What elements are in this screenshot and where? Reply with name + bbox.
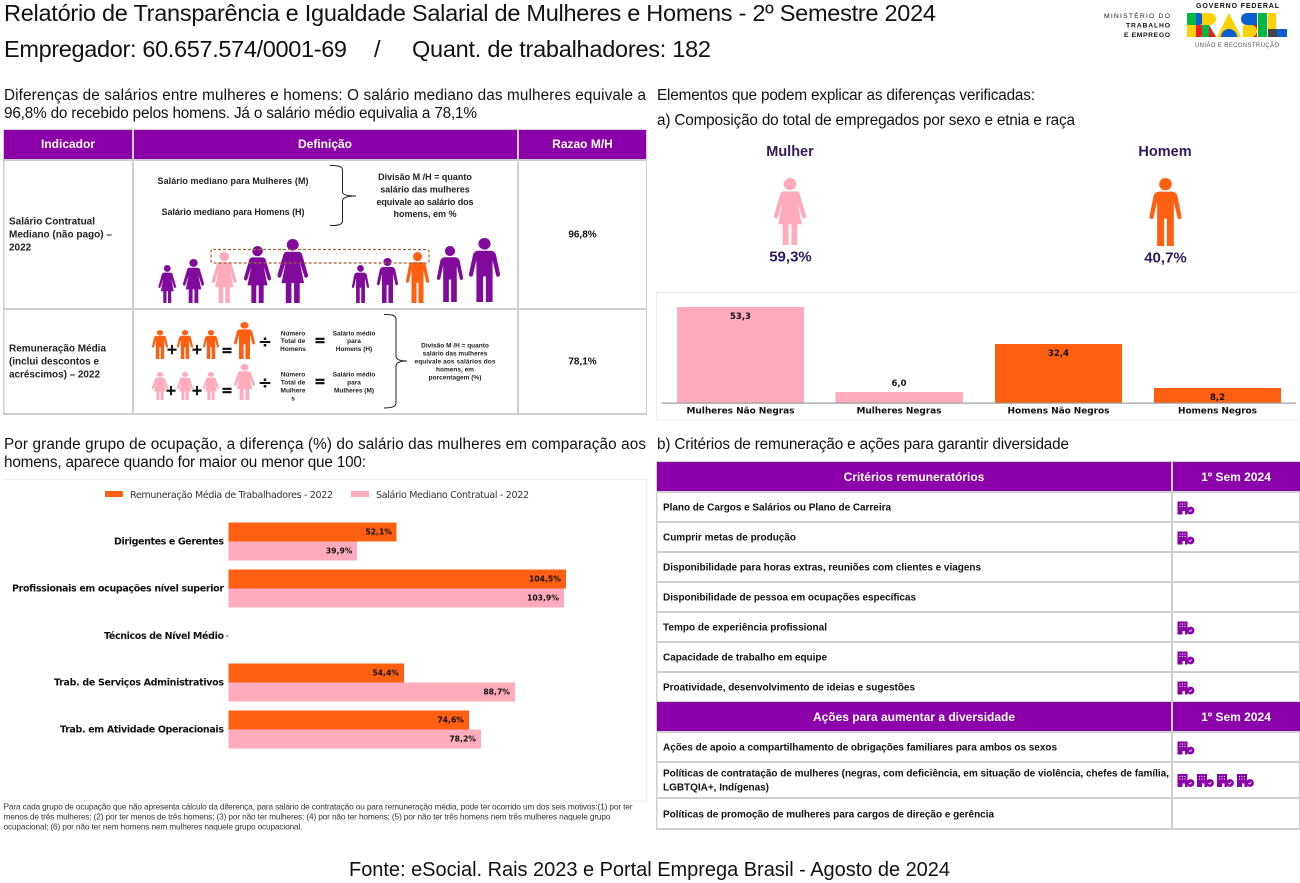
row label: salário contratual: Salário Contratual bbox=[9, 216, 95, 228]
composição: mulher: 59,3% bbox=[769, 248, 812, 266]
title bbox=[4, 0, 936, 62]
logo: ministério: MINISTÉRIO DO bbox=[1104, 11, 1170, 20]
text: elementos explicativos: a) Composição do total de empregados por sexo e etnia e raça bbox=[657, 112, 1075, 129]
definição: remuneração média homens: Total de bbox=[281, 338, 306, 345]
chave e divisão M/H: porcentagem (%) bbox=[429, 374, 481, 382]
header: colunas: Definição bbox=[298, 137, 352, 151]
definição: remuneração média homens: + bbox=[166, 342, 178, 358]
bar chart: sexo e raça: 32,4 bbox=[1048, 349, 1069, 359]
row label: remuneração média: (inclui descontos e bbox=[9, 356, 99, 368]
chave e divisão M/H: salário das mulheres bbox=[423, 350, 488, 358]
ícones: ações bbox=[1178, 742, 1254, 787]
bars: dirigentes e gerentes bbox=[114, 522, 396, 560]
header: ações para diversidade: 1º Sem 2024 bbox=[1201, 710, 1271, 724]
linhas de critérios: Disponibilidade de pessoa em ocupações específicas bbox=[663, 592, 916, 604]
definição: remuneração média mulheres: + bbox=[191, 383, 203, 399]
title: Empregador: 60.657.574/0001-69 bbox=[4, 36, 347, 62]
fonte: Fonte: eSocial. Rais 2023 e Portal Emprega Brasil - Agosto de 2024 bbox=[349, 859, 950, 881]
definição: remuneração média mulheres: = bbox=[221, 383, 233, 399]
bar chart: sexo e raça: 53,3 bbox=[730, 312, 751, 322]
logo: ministério: TRABALHO bbox=[1126, 22, 1170, 30]
linhas de ações: Ações de apoio a compartilhamento de obrigações familiares para ambos os sexos bbox=[663, 742, 1057, 754]
row label: remuneração média bbox=[9, 344, 106, 380]
definição: remuneração média mulheres: Total de bbox=[281, 380, 306, 386]
bars: serviços administrativos bbox=[54, 664, 515, 702]
row label: remuneração média: acréscimos) – 2022 bbox=[9, 370, 100, 380]
bar chart: sexo e raça: Mulheres Negras bbox=[856, 406, 942, 416]
text: diferenças de salários: Diferenças de salários entre mulheres e homens: O salário mediano das mulheres equivale a bbox=[4, 87, 646, 104]
logo: governo federal: UNIÃO E RECONSTRUÇÃO bbox=[1195, 42, 1279, 49]
chave e divisão M/H: homens, em bbox=[436, 366, 474, 374]
definição: remuneração média mulheres: Número bbox=[281, 372, 305, 378]
bar chart: sexo e raça: Homens Negros bbox=[1178, 406, 1257, 416]
bar chart: sexo e raça: Mulheres Não Negras bbox=[686, 406, 794, 416]
composição: homem: Homem bbox=[1138, 144, 1192, 160]
row label: salário contratual bbox=[9, 216, 112, 254]
bars: serviços administrativos: Trab. de Serviços Administrativos bbox=[54, 678, 224, 688]
definição: remuneração média homens: Salário médio bbox=[333, 330, 375, 338]
title: Quant. de trabalhadores: 182 bbox=[412, 36, 711, 62]
linhas de critérios: Tempo de experiência profissional bbox=[663, 622, 827, 634]
chave e divisão M/H: equivale aos salários dos bbox=[414, 358, 496, 366]
definição: remuneração média mulheres: s bbox=[291, 396, 295, 402]
panel: tabela de critérios bbox=[656, 461, 1300, 830]
definição: remuneração média homens: = bbox=[221, 343, 233, 359]
definição: remuneração média homens: para bbox=[347, 338, 361, 345]
header: colunas: Indicador bbox=[41, 137, 95, 151]
bars: serviços administrativos: 54,4% bbox=[372, 668, 399, 678]
bar chart: sexo e raça: 6,0 bbox=[891, 379, 907, 389]
bar chart: sexo e raça: Homens Não Negros bbox=[1008, 406, 1110, 416]
text: diferenças de salários: 96,8% do recebido pelos homens. Já o salário médio equivalia a 78,1% bbox=[4, 105, 477, 122]
composição: homem bbox=[1138, 144, 1192, 266]
composição: mulher: Mulher bbox=[766, 144, 814, 160]
bars: dirigentes e gerentes: Dirigentes e Gerentes bbox=[114, 536, 224, 548]
header: ações para diversidade bbox=[813, 710, 1271, 724]
linhas de ações: Políticas de contratação de mulheres (negras, com deficiência, em situação de violência, chefes de família, bbox=[663, 768, 1169, 780]
header: ações para diversidade: Ações para aumentar a diversidade bbox=[813, 710, 1015, 724]
text: por grande grupo de ocupação: homens, aparece quando for maior ou menor que 100: bbox=[4, 454, 366, 471]
definição: remuneração média mulheres bbox=[152, 364, 375, 402]
definição: salário mediano: Salário mediano para Homens (H) bbox=[162, 207, 304, 217]
valor: 78,1%: 78,1% bbox=[568, 356, 597, 368]
linhas de critérios: Cumprir metas de produção bbox=[663, 532, 796, 544]
bars: profissionais: Profissionais em ocupações nível superior bbox=[12, 584, 224, 594]
header: critérios remuneratórios: Critérios remuneratórios bbox=[844, 470, 985, 484]
definição: remuneração média homens: ÷ bbox=[258, 332, 272, 352]
logo: governo federal bbox=[1187, 3, 1287, 49]
definição: remuneração média mulheres: Mulhere bbox=[281, 388, 306, 394]
header: colunas: Razao M/H bbox=[552, 137, 613, 151]
row label: salário contratual: Mediano (não pago) – bbox=[9, 230, 112, 240]
definição: remuneração média homens: Homens bbox=[280, 346, 306, 353]
bars: atividade operacionais bbox=[60, 710, 481, 748]
text: diferenças de salários bbox=[4, 87, 646, 122]
logo: ministério bbox=[1104, 11, 1170, 39]
linhas de critérios: Capacidade de trabalho em equipe bbox=[663, 652, 827, 664]
header: critérios remuneratórios: 1º Sem 2024 bbox=[1201, 470, 1271, 484]
text: elementos explicativos: Elementos que podem explicar as diferenças verificadas: bbox=[657, 87, 1035, 104]
legend: Remuneração Média de Trabalhadores - 2022 bbox=[130, 490, 333, 501]
definição: remuneração média mulheres: ÷ bbox=[258, 373, 272, 393]
linhas de critérios bbox=[663, 502, 981, 694]
linhas de critérios: Disponibilidade para horas extras, reuniões com clientes e viagens bbox=[663, 562, 981, 574]
definição: remuneração média homens: = bbox=[314, 333, 326, 349]
bar chart: sexo e raça: 8,2 bbox=[1210, 393, 1225, 403]
definição: salário mediano: salário das mulheres bbox=[380, 184, 470, 194]
definição: remuneração média homens bbox=[152, 322, 375, 359]
definição: salário mediano bbox=[158, 165, 474, 226]
footnote: ocupacional; (6) por não ter nem homens nem mulheres naquele grupo ocupacional. bbox=[4, 822, 302, 832]
linhas de ações: Políticas de promoção de mulheres para cargos de direção e gerência bbox=[663, 810, 994, 820]
bars: atividade operacionais: Trab. em Atividade Operacionais bbox=[60, 724, 224, 736]
bars: dirigentes e gerentes: 39,9% bbox=[326, 546, 353, 556]
row label: remuneração média: Remuneração Média bbox=[9, 344, 106, 354]
bars: dirigentes e gerentes: 52,1% bbox=[365, 528, 392, 536]
panel: tabela de indicadores bbox=[3, 129, 647, 415]
bars: profissionais: 103,9% bbox=[527, 594, 559, 602]
linhas de ações bbox=[663, 742, 1169, 820]
text: elementos explicativos bbox=[657, 87, 1075, 129]
heading: critérios de remuneração: b) Critérios de remuneração e ações para garantir diversidade bbox=[657, 436, 1069, 453]
header: critérios remuneratórios bbox=[844, 470, 1271, 484]
bars: profissionais bbox=[12, 570, 566, 608]
linhas de critérios: Plano de Cargos e Salários ou Plano de Carreira bbox=[663, 502, 891, 514]
composição: homem: 40,7% bbox=[1144, 250, 1187, 266]
definição: remuneração média mulheres: + bbox=[165, 383, 177, 399]
definição: salário mediano: Divisão M /H = quanto bbox=[378, 172, 472, 182]
definição: remuneração média mulheres: = bbox=[314, 374, 326, 390]
definição: remuneração média mulheres: Salário médio bbox=[333, 372, 375, 378]
footnote bbox=[4, 802, 633, 832]
ícones: critérios bbox=[1178, 502, 1194, 694]
bars: profissionais: 104,5% bbox=[529, 574, 561, 584]
definição: remuneração média homens: Homens (H) bbox=[336, 346, 372, 353]
legend bbox=[105, 490, 529, 501]
valor: 96,8%: 96,8% bbox=[568, 230, 597, 240]
definição: remuneração média mulheres: Mulheres (M) bbox=[334, 388, 374, 394]
bar chart: sexo e raça bbox=[656, 292, 1300, 420]
definição: remuneração média homens: Número bbox=[281, 330, 305, 338]
header: colunas bbox=[41, 137, 613, 151]
title: / bbox=[374, 36, 381, 62]
text: por grande grupo de ocupação: Por grande grupo de ocupação, a diferença (%) do salário das mulheres em comparação aos bbox=[4, 436, 646, 453]
definição: salário mediano: homens, em % bbox=[393, 209, 457, 219]
footnote: Para cada grupo de ocupação que não apresenta cálculo da diferença, para salário de contratação ou para remuneração média, pode ter ocorrido um dos seis motivos:(1) por ter bbox=[4, 802, 633, 812]
title: Relatório de Transparência e Igualdade Salarial de Mulheres e Homens - 2º Semestre 2024 bbox=[4, 0, 936, 26]
ícones: pessoas ordenadas por salário bbox=[158, 238, 500, 303]
logo: ministério: E EMPREGO bbox=[1124, 32, 1170, 39]
definição: salário mediano: equivale ao salário dos bbox=[376, 197, 474, 207]
linhas de ações: LGBTQIA+, Indígenas) bbox=[663, 782, 769, 794]
text: por grande grupo de ocupação bbox=[4, 436, 646, 471]
bars: atividade operacionais: 74,6% bbox=[437, 716, 464, 724]
definição: remuneração média homens: + bbox=[191, 342, 203, 358]
chave e divisão M/H: Divisão M /H = quanto bbox=[421, 342, 489, 350]
bar chart: grupos de ocupação bbox=[3, 480, 646, 801]
chave e divisão M/H bbox=[384, 314, 496, 408]
logo: governo federal: GOVERNO FEDERAL bbox=[1196, 3, 1280, 10]
row label: salário contratual: 2022 bbox=[9, 242, 32, 254]
composição: mulher bbox=[766, 144, 814, 266]
legend: Salário Mediano Contratual - 2022 bbox=[376, 490, 529, 501]
bars: serviços administrativos: 88,7% bbox=[483, 688, 510, 696]
bars: técnicos: Técnicos de Nível Médio bbox=[104, 631, 224, 642]
definição: salário mediano: Salário mediano para Mulheres (M) bbox=[158, 176, 308, 186]
footnote: menos de três mulheres; (2) por ter menos de três homens; (3) por não ter mulheres; (4) por não ter homens; (5) por não ter três homens nem três mulheres naquele grupo bbox=[4, 812, 611, 822]
linhas de critérios: Proatividade, desenvolvimento de ideias e sugestões bbox=[663, 682, 915, 694]
definição: remuneração média mulheres: para bbox=[347, 380, 361, 386]
bars: atividade operacionais: 78,2% bbox=[449, 734, 476, 744]
